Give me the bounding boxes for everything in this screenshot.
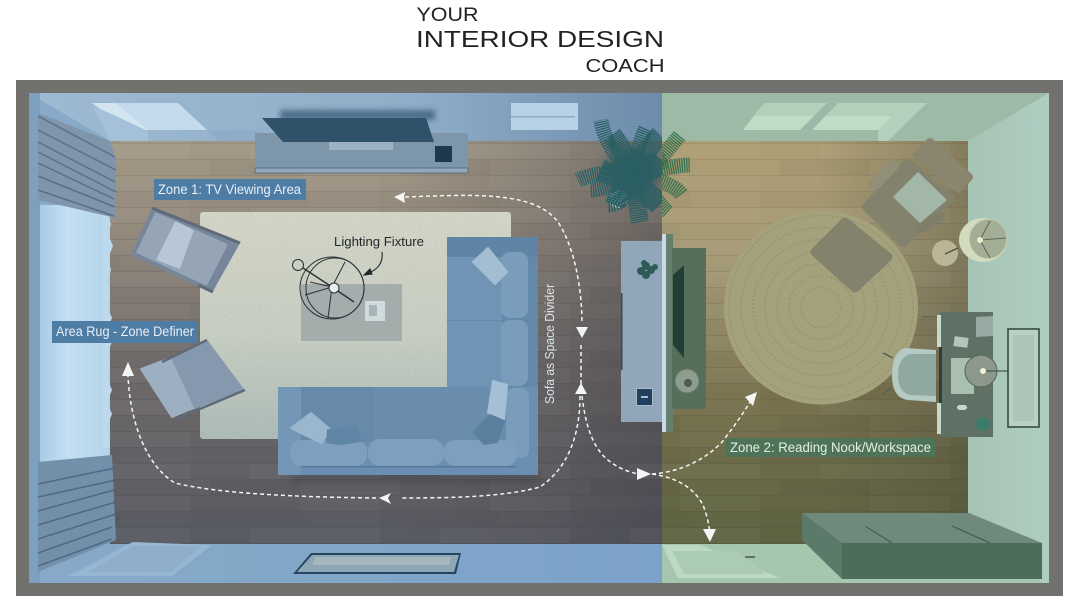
- round jute rug: [724, 210, 918, 404]
- armchair bottom: [141, 340, 245, 419]
- door mat: [293, 553, 461, 574]
- media divider: cabinet side: [621, 234, 666, 432]
- armchair top: [131, 208, 240, 293]
- TV console: [255, 110, 468, 173]
- media divider: TV side: [666, 234, 706, 432]
- area rug label: Area Rug - Zone Definer: [56, 324, 194, 339]
- traffic flow arrows: [122, 192, 757, 542]
- coffee table: [301, 284, 402, 341]
- desk: [922, 312, 993, 437]
- desk lamp: [965, 355, 1031, 387]
- low bench: [802, 513, 1042, 579]
- plant: [578, 120, 690, 222]
- walls: [29, 93, 1049, 583]
- lounge chair: [815, 142, 969, 288]
- doors and bottom wall details: [68, 542, 780, 578]
- area rug label: [52, 321, 197, 343]
- lighting fixture: [292, 257, 364, 319]
- desk chair: [882, 348, 936, 402]
- curtains: window wall: [29, 93, 116, 583]
- floor right: [662, 141, 968, 544]
- windows: [92, 103, 927, 141]
- zone 1 label: Zone 1: TV Viewing Area: [158, 182, 301, 197]
- title: INTERIOR DESIGN: [416, 26, 664, 52]
- callout arrow: lighting: [364, 252, 382, 275]
- area rug: [200, 212, 511, 439]
- title: COACH: [586, 55, 664, 76]
- title: YOUR: [416, 4, 478, 26]
- wall art: [1008, 329, 1039, 427]
- title: [416, 4, 664, 76]
- sofa as space divider label: Sofa as Space Divider: [543, 284, 557, 404]
- zone 1 label: [154, 179, 306, 200]
- floor left: [110, 141, 662, 544]
- lighting fixture label: Lighting Fixture: [334, 235, 424, 249]
- floor lamp and side table: [932, 218, 1007, 266]
- sofa: [278, 237, 540, 482]
- zone 2 label: Zone 2: Reading Nook/Workspace: [730, 440, 931, 455]
